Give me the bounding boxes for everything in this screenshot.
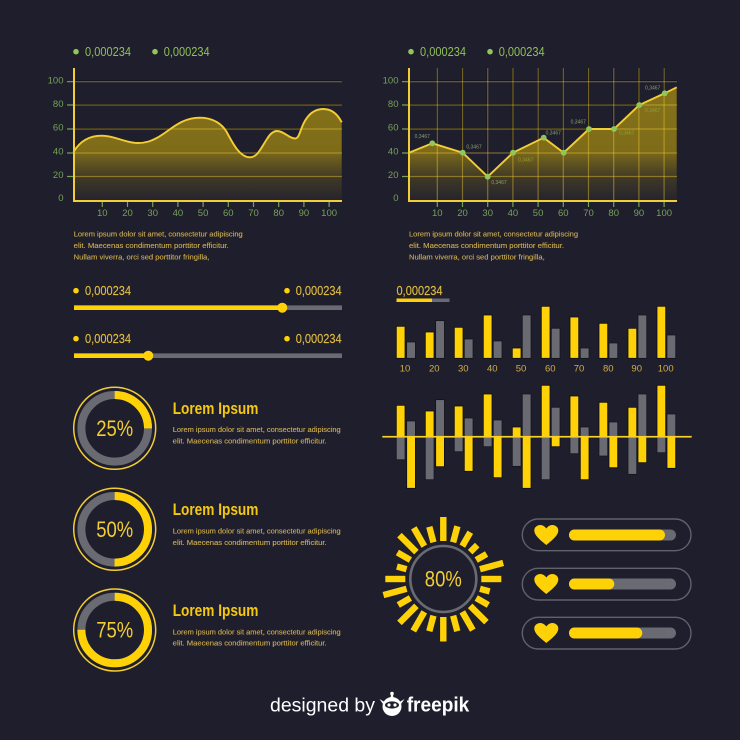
data point values: 0,3467 — [518, 157, 534, 163]
bar chart labels: 80 — [603, 364, 614, 375]
x axis labels: 40 — [173, 208, 183, 219]
description text: elit. Maecenas condimentum porttitor efficitur. — [409, 241, 564, 250]
slider: second: 0,000234 — [85, 331, 131, 346]
footer: freepik credit: designed by — [270, 695, 375, 717]
y axis labels: 40 — [388, 146, 398, 158]
description text: Lorem ipsum dolor sit amet, consectetur adipiscing — [74, 230, 243, 239]
x axis labels: 30 — [482, 208, 493, 219]
area fill with polyline — [409, 68, 677, 201]
x axis labels: 80 — [608, 208, 619, 219]
slider: first — [73, 283, 342, 313]
legend: area chart — [73, 44, 210, 59]
data point values: 0,3467 — [619, 131, 635, 137]
x axis labels: 10 — [97, 208, 108, 219]
data point values — [415, 85, 661, 186]
description text: elit. Maecenas condimentum porttitor efficitur. — [74, 241, 229, 250]
legend: area chart: 0,000234 — [164, 44, 210, 59]
y axis labels — [48, 76, 64, 204]
panel: line chart — [383, 44, 677, 261]
donut item: 25%: elit. Maecenas condimentum porttitor efficitur. — [173, 436, 327, 446]
x axis labels: 70 — [583, 208, 594, 219]
axes — [402, 68, 677, 207]
data points — [429, 90, 668, 180]
donut item: 75%: elit. Maecenas condimentum porttitor efficitur. — [173, 639, 327, 648]
axes — [67, 68, 342, 207]
donut item: 50%: elit. Maecenas condimentum porttitor efficitur. — [173, 538, 327, 547]
bar chart labels — [400, 364, 674, 375]
panel: area chart — [48, 44, 342, 261]
donut item: 75%: Lorem ipsum dolor sit amet, consectetur adipiscing — [173, 627, 341, 636]
x axis labels — [432, 208, 672, 219]
y axis labels: 40 — [53, 146, 64, 158]
data point values: 0,3467 — [415, 134, 430, 140]
donut item: 75%: 75% — [96, 618, 133, 643]
data point values: 0,3467 — [645, 108, 661, 114]
donut item: 50%: Lorem ipsum dolor sit amet, consectetur adipiscing — [173, 526, 341, 535]
data point values: 0,3467 — [645, 85, 661, 91]
bar chart labels: 40 — [487, 364, 498, 375]
footer: freepik credit: freepik — [407, 695, 470, 717]
icon: heart — [534, 525, 558, 545]
donut item: 25%: 25% — [96, 416, 133, 441]
footer: freepik credit — [270, 692, 470, 717]
legend: line chart — [408, 44, 545, 59]
description text — [409, 230, 578, 261]
y axis labels: 100 — [383, 76, 398, 86]
icon: heart — [534, 623, 558, 643]
x axis labels: 50 — [198, 208, 208, 219]
x axis labels — [97, 208, 337, 219]
y axis labels: 100 — [48, 76, 64, 86]
y axis labels: 80 — [53, 99, 64, 110]
donut item: 50%: Lorem Ipsum — [173, 501, 258, 519]
bar chart labels: 60 — [545, 364, 556, 375]
x axis labels: 60 — [223, 208, 234, 219]
donut item: 25%: Lorem ipsum dolor sit amet, consectetur adipiscing — [173, 425, 341, 434]
x axis labels: 80 — [273, 208, 284, 219]
legend: area chart: 0,000234 — [85, 44, 131, 59]
description text: Nullam viverra, orci sed porttitor fringilla, — [74, 252, 209, 261]
y axis labels: 60 — [53, 122, 64, 134]
data point values: 0,3467 — [491, 180, 507, 186]
x axis labels: 20 — [122, 208, 133, 219]
heart progress pill: second — [522, 568, 691, 600]
donut item: 75% — [74, 589, 341, 671]
x axis labels: 90 — [299, 208, 309, 219]
data point values: 0,3467 — [466, 144, 482, 150]
bar chart labels: 30 — [458, 364, 469, 375]
y axis labels: 0 — [393, 193, 398, 204]
area fill with smooth curve — [74, 82, 342, 201]
description text — [74, 230, 243, 261]
bar chart — [396, 306, 676, 375]
x axis labels: 40 — [508, 208, 518, 219]
y axis labels: 60 — [388, 122, 398, 134]
donut item: 25%: Lorem Ipsum — [173, 400, 258, 418]
x axis labels: 60 — [558, 208, 569, 219]
x axis labels: 100 — [656, 208, 672, 219]
data point values: 0,3467 — [546, 131, 561, 137]
x axis labels: 100 — [321, 208, 337, 219]
bar chart labels: 10 — [400, 364, 410, 375]
icon: freepik mascot — [380, 692, 404, 716]
x axis labels: 20 — [457, 208, 468, 219]
bar chart labels: 90 — [631, 364, 642, 375]
x axis labels: 30 — [147, 208, 158, 219]
x axis labels: 10 — [432, 208, 443, 219]
donut item: 50% — [74, 488, 341, 570]
donut item: 25% — [74, 387, 341, 469]
bar chart labels: 20 — [429, 364, 440, 375]
description text: Nullam viverra, orci sed porttitor fringilla, — [409, 252, 545, 261]
bar chart labels: 100 — [658, 364, 674, 375]
heart progress pill: third — [522, 617, 691, 649]
diverging bar chart — [382, 385, 692, 488]
legend: line chart: 0,000234 — [499, 44, 545, 59]
bar chart labels: 50 — [516, 364, 526, 375]
y axis labels: 20 — [388, 170, 398, 181]
x axis labels: 70 — [248, 208, 259, 219]
description text: Lorem ipsum dolor sit amet, consectetur adipiscing — [409, 230, 578, 239]
slider: first: 0,000234 — [85, 283, 131, 298]
donut item: 50%: 50% — [96, 517, 133, 542]
x axis labels: 50 — [533, 208, 543, 219]
bar chart labels: 70 — [574, 364, 584, 375]
icon: heart — [534, 574, 558, 594]
heart progress pill: first — [522, 519, 691, 551]
radial burst gauge: 80% — [383, 517, 504, 642]
y axis labels: 0 — [58, 193, 64, 204]
data point values: 0,3467 — [571, 119, 586, 125]
bar chart header with mini progress: 0,000234 — [396, 283, 442, 298]
slider: second: 0,000234 — [296, 331, 342, 346]
slider: second — [73, 331, 342, 361]
y axis labels: 80 — [388, 99, 398, 110]
slider: first: 0,000234 — [296, 283, 342, 298]
legend: line chart: 0,000234 — [420, 44, 466, 59]
y axis labels — [383, 76, 398, 204]
radial burst gauge: 80%: 80% — [425, 567, 462, 592]
y axis labels: 20 — [53, 170, 64, 181]
donut item: 75%: Lorem Ipsum — [173, 602, 258, 620]
x axis labels: 90 — [634, 208, 644, 219]
